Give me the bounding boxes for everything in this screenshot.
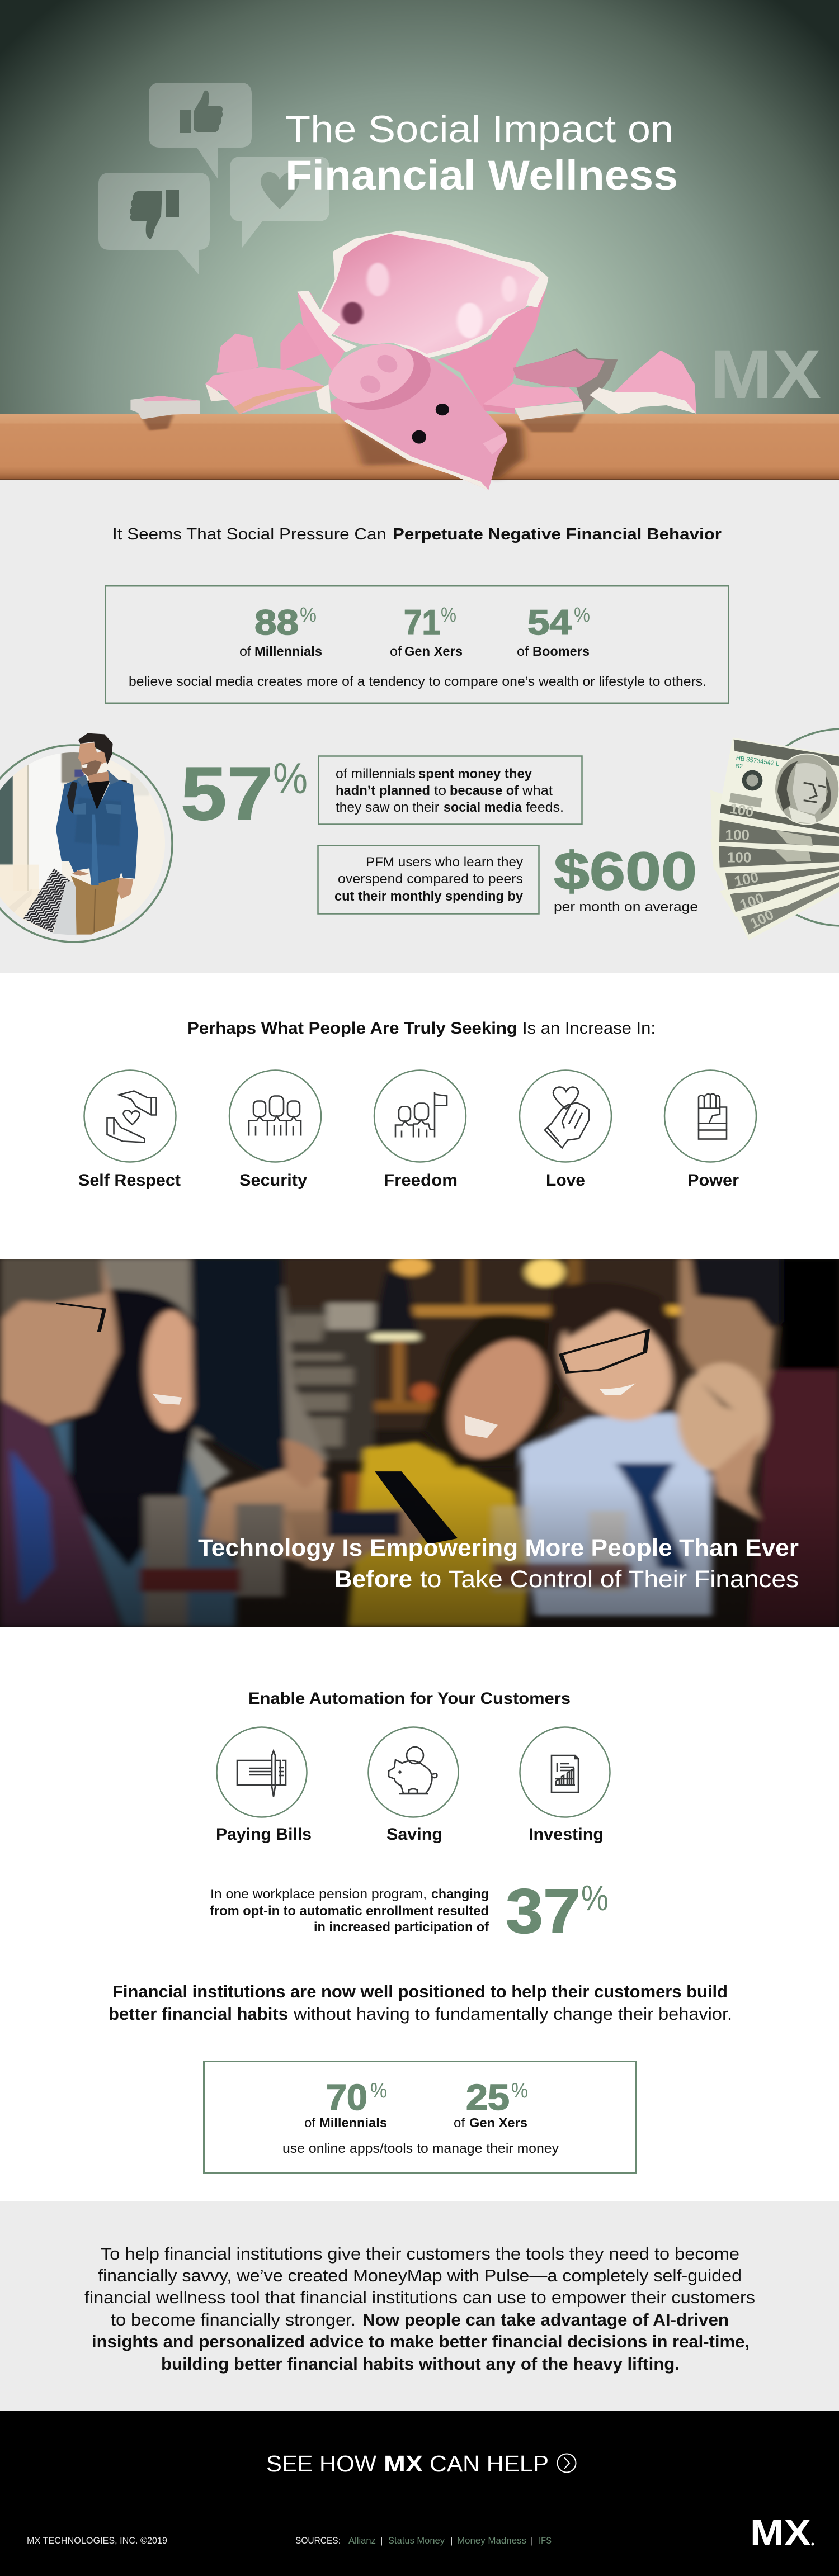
- item: self respect: Self Respect: [78, 1171, 181, 1190]
- photo: fan of hundred dollar bills: 100: [747, 906, 776, 932]
- icon: hand holding heart: [545, 1087, 589, 1148]
- heading: [187, 1019, 656, 1038]
- text: closing paragraph: [84, 2244, 755, 2374]
- stat: 37 percent: 37: [506, 1876, 581, 1946]
- item: saving: [368, 1727, 459, 1844]
- banner headline: [198, 1535, 799, 1593]
- photo: fan of hundred dollar bills: 100: [733, 868, 760, 890]
- text: pension program: In one workplace pension program,: [210, 1887, 427, 1902]
- icon: check and pen: [237, 1751, 286, 1797]
- callout: PFM users: [318, 845, 539, 913]
- panel: hero: [0, 0, 839, 490]
- stat: 600 dollars per month: per month on average: [554, 899, 698, 915]
- stat: 70% of Millennials: [304, 2077, 387, 2130]
- text: pension program: changing: [431, 1887, 489, 1902]
- stat: 88% of Millennials: Millennials: [254, 644, 322, 659]
- banner headline: Technology Is Empowering More People Than Ever: [198, 1535, 799, 1561]
- icon: heart speech bubble: [230, 157, 329, 248]
- stat: 71% of Gen Xers: %: [441, 603, 456, 626]
- item: self respect: [78, 1070, 181, 1190]
- panel: online tools stats: [204, 2062, 635, 2174]
- stat: 71% of Gen Xers: [390, 603, 463, 659]
- stat: 88% of Millennials: 88: [254, 603, 299, 642]
- callout: millennial spending: feeds.: [526, 800, 564, 815]
- stat caption: believe social media creates more of a tendency to compare one’s wealth or lifestyle to others.: [129, 674, 706, 689]
- icon: thumbs down speech bubble: [98, 173, 210, 274]
- heading: It Seems That Social Pressure Can: [112, 525, 386, 543]
- item: security: Security: [239, 1171, 307, 1190]
- icon: raised fist: [699, 1094, 727, 1139]
- item: power: [664, 1070, 756, 1190]
- illustration: broken piggy bank: [130, 231, 696, 490]
- sources: Status Money: [388, 2535, 445, 2546]
- text: closing paragraph: financial wellness tool that financial institutions can use to empower their customers: [84, 2288, 755, 2307]
- logo: MX watermark: MX: [710, 336, 821, 413]
- text: closing paragraph: building better financial habits without any of the heavy lifting.: [161, 2354, 680, 2374]
- stat: 25% of Gen Xers: 25: [466, 2077, 510, 2118]
- callout: PFM users: PFM users who learn they: [366, 855, 523, 870]
- stat: 54% of Boomers: %: [574, 603, 590, 626]
- call to action: [266, 2451, 576, 2476]
- banner headline: to Take Control of Their Finances: [420, 1566, 799, 1593]
- icon: group of people: [249, 1096, 301, 1136]
- heading: Is an Increase In:: [522, 1019, 656, 1038]
- stat: 54% of Boomers: [517, 603, 590, 659]
- stat: 70% of Millennials: Millennials: [319, 2115, 387, 2130]
- call to action: MX: [384, 2451, 423, 2476]
- panel: social pressure section: [0, 525, 839, 949]
- photo: fan of hundred dollar bills: 100: [727, 849, 751, 866]
- text: institutions positioned: better financial habits: [109, 2004, 288, 2024]
- stat: 88% of Millennials: %: [300, 603, 317, 626]
- text: institutions positioned: [109, 1982, 732, 2024]
- callout: millennial spending: what: [522, 783, 553, 798]
- heading: Enable Automation for Your Customers: [248, 1689, 571, 1708]
- stat: 57 percent: %: [273, 754, 308, 803]
- text: institutions positioned: Financial institutions are now well positioned to help their customers build: [112, 1982, 728, 2001]
- callout: millennial spending: spent money they: [418, 766, 532, 782]
- item: saving: Saving: [386, 1825, 442, 1844]
- panel: technology photo banner: [0, 1257, 839, 1627]
- sources: |: [450, 2535, 453, 2546]
- photo: fan of hundred dollar bills: HB 35734542 L: [736, 755, 780, 768]
- panel: enable automation: [109, 1689, 732, 2174]
- icon: piggy bank with coin: [389, 1747, 437, 1794]
- callout: millennial spending: of millennials: [336, 766, 416, 782]
- stat: 57 percent: [181, 751, 308, 836]
- item: freedom: [374, 1070, 466, 1190]
- stat: 70% of Millennials: %: [370, 2079, 387, 2103]
- social pressure section background: [0, 480, 839, 973]
- stat: 57 percent: 57: [181, 751, 273, 836]
- stat: 600 dollars per month: $600: [554, 841, 697, 901]
- call to action: CAN HELP: [430, 2451, 549, 2476]
- heading: [112, 525, 722, 543]
- stat: 70% of Millennials: of: [304, 2115, 316, 2130]
- stat: 88% of Millennials: [239, 603, 322, 659]
- heading: Perpetuate Negative Financial Behavior: [393, 525, 722, 543]
- item: love: Love: [546, 1171, 585, 1190]
- item: investing: Investing: [529, 1825, 604, 1844]
- title: Financial Wellness: [285, 152, 678, 198]
- photo: man with shopping bags in circle: [0, 733, 183, 949]
- icon: financial document: [552, 1755, 578, 1792]
- stat: 25% of Gen Xers: [454, 2077, 528, 2130]
- stat: 25% of Gen Xers: Gen Xers: [469, 2115, 527, 2130]
- sources: |: [531, 2535, 533, 2546]
- callout: millennial spending: hadn’t planned: [336, 783, 430, 798]
- text: closing paragraph: insights and personalized advice to make better financial decisions in real-time,: [92, 2332, 750, 2351]
- stat: 54% of Boomers: Boomers: [532, 644, 590, 659]
- sources: |: [380, 2535, 383, 2546]
- photo: fan of hundred dollar bills: [710, 729, 839, 940]
- text: institutions positioned: without having to fundamentally change their behavior.: [293, 2004, 732, 2024]
- photo: fan of hundred dollar bills: 100: [725, 827, 750, 844]
- icon: thumbs up speech bubble: [149, 83, 252, 179]
- panel: MoneyMap with Pulse: [0, 2201, 839, 2411]
- stat: 54% of Boomers: of: [517, 644, 529, 659]
- photo: fan of hundred dollar bills: 100: [728, 799, 755, 820]
- stat: 71% of Gen Xers: Gen Xers: [404, 644, 463, 659]
- text: closing paragraph: Now people can take advantage of AI-driven: [362, 2310, 729, 2329]
- title: The Social Impact on: [285, 108, 673, 150]
- copyright: MX TECHNOLOGIES, INC. ©2019: [27, 2535, 167, 2546]
- callout: PFM users: overspend compared to peers: [338, 872, 523, 887]
- photo: friends in cafe looking at phone: [0, 1257, 839, 1627]
- callout: millennial spending: because of: [450, 783, 519, 798]
- stat caption: use online apps/tools to manage their money: [282, 2141, 559, 2156]
- stat: 37 percent: %: [581, 1878, 609, 1918]
- icon: people with flag: [395, 1092, 447, 1137]
- text: pension program: in increased participation of: [314, 1920, 489, 1935]
- stat: 37 percent: [506, 1876, 609, 1946]
- heading: Perhaps What People Are Truly Seeking: [187, 1019, 517, 1038]
- banner headline: Before: [334, 1566, 412, 1593]
- shelf: [0, 414, 839, 480]
- stat: 70% of Millennials: 70: [326, 2077, 367, 2118]
- stat: 88% of Millennials: of: [239, 644, 252, 659]
- icon: arrow in circle: [557, 2454, 576, 2472]
- photo: fan of hundred dollar bills: 100: [737, 889, 766, 913]
- stat: 25% of Gen Xers: %: [511, 2079, 528, 2103]
- hero backdrop: [0, 0, 839, 415]
- item: power: Power: [687, 1171, 739, 1190]
- stat: 600 dollars per month: [554, 841, 698, 915]
- callout: millennial spending: to: [434, 783, 446, 798]
- stat: 71% of Gen Xers: 71: [404, 603, 440, 642]
- sources: SOURCES:: [295, 2535, 341, 2546]
- text: closing paragraph: financially savvy, we’ve created MoneyMap with Pulse—a completely self-guided: [98, 2266, 742, 2285]
- title: [285, 108, 678, 198]
- call to action: SEE HOW: [266, 2451, 376, 2476]
- callout: millennial spending: they saw on their: [336, 800, 439, 815]
- sources: [295, 2535, 552, 2546]
- logo: MX: MX: [750, 2512, 811, 2553]
- text: closing paragraph: To help financial institutions give their customers the tools they need to become: [101, 2244, 739, 2264]
- item: paying bills: Paying Bills: [216, 1825, 312, 1844]
- panel: footer: [0, 2411, 839, 2576]
- panel: generation comparison stats: [105, 586, 728, 703]
- sources: Money Madness: [457, 2535, 526, 2546]
- stat: 54% of Boomers: 54: [527, 603, 572, 642]
- stat: 71% of Gen Xers: of: [390, 644, 402, 659]
- callout: PFM users: cut their monthly spending by: [334, 889, 524, 904]
- callout: millennial spending: social media: [444, 800, 522, 815]
- text: closing paragraph: to become financially stronger.: [111, 2310, 356, 2329]
- sources: Allianz: [348, 2535, 376, 2546]
- panel: what people are seeking: [78, 1019, 756, 1190]
- icon: hands and heart: [107, 1091, 157, 1143]
- item: love: [520, 1070, 611, 1190]
- item: freedom: Freedom: [384, 1171, 458, 1190]
- item: investing: [520, 1727, 610, 1844]
- stat: 25% of Gen Xers: of: [454, 2115, 465, 2130]
- item: paying bills: [216, 1727, 312, 1844]
- callout: millennial spending: [319, 756, 582, 824]
- sources: IFS: [539, 2535, 552, 2546]
- text: pension program: from opt-in to automatic enrollment resulted: [210, 1903, 489, 1919]
- text: pension program: [210, 1887, 489, 1935]
- item: security: [229, 1070, 321, 1190]
- photo: fan of hundred dollar bills: B2: [735, 763, 743, 770]
